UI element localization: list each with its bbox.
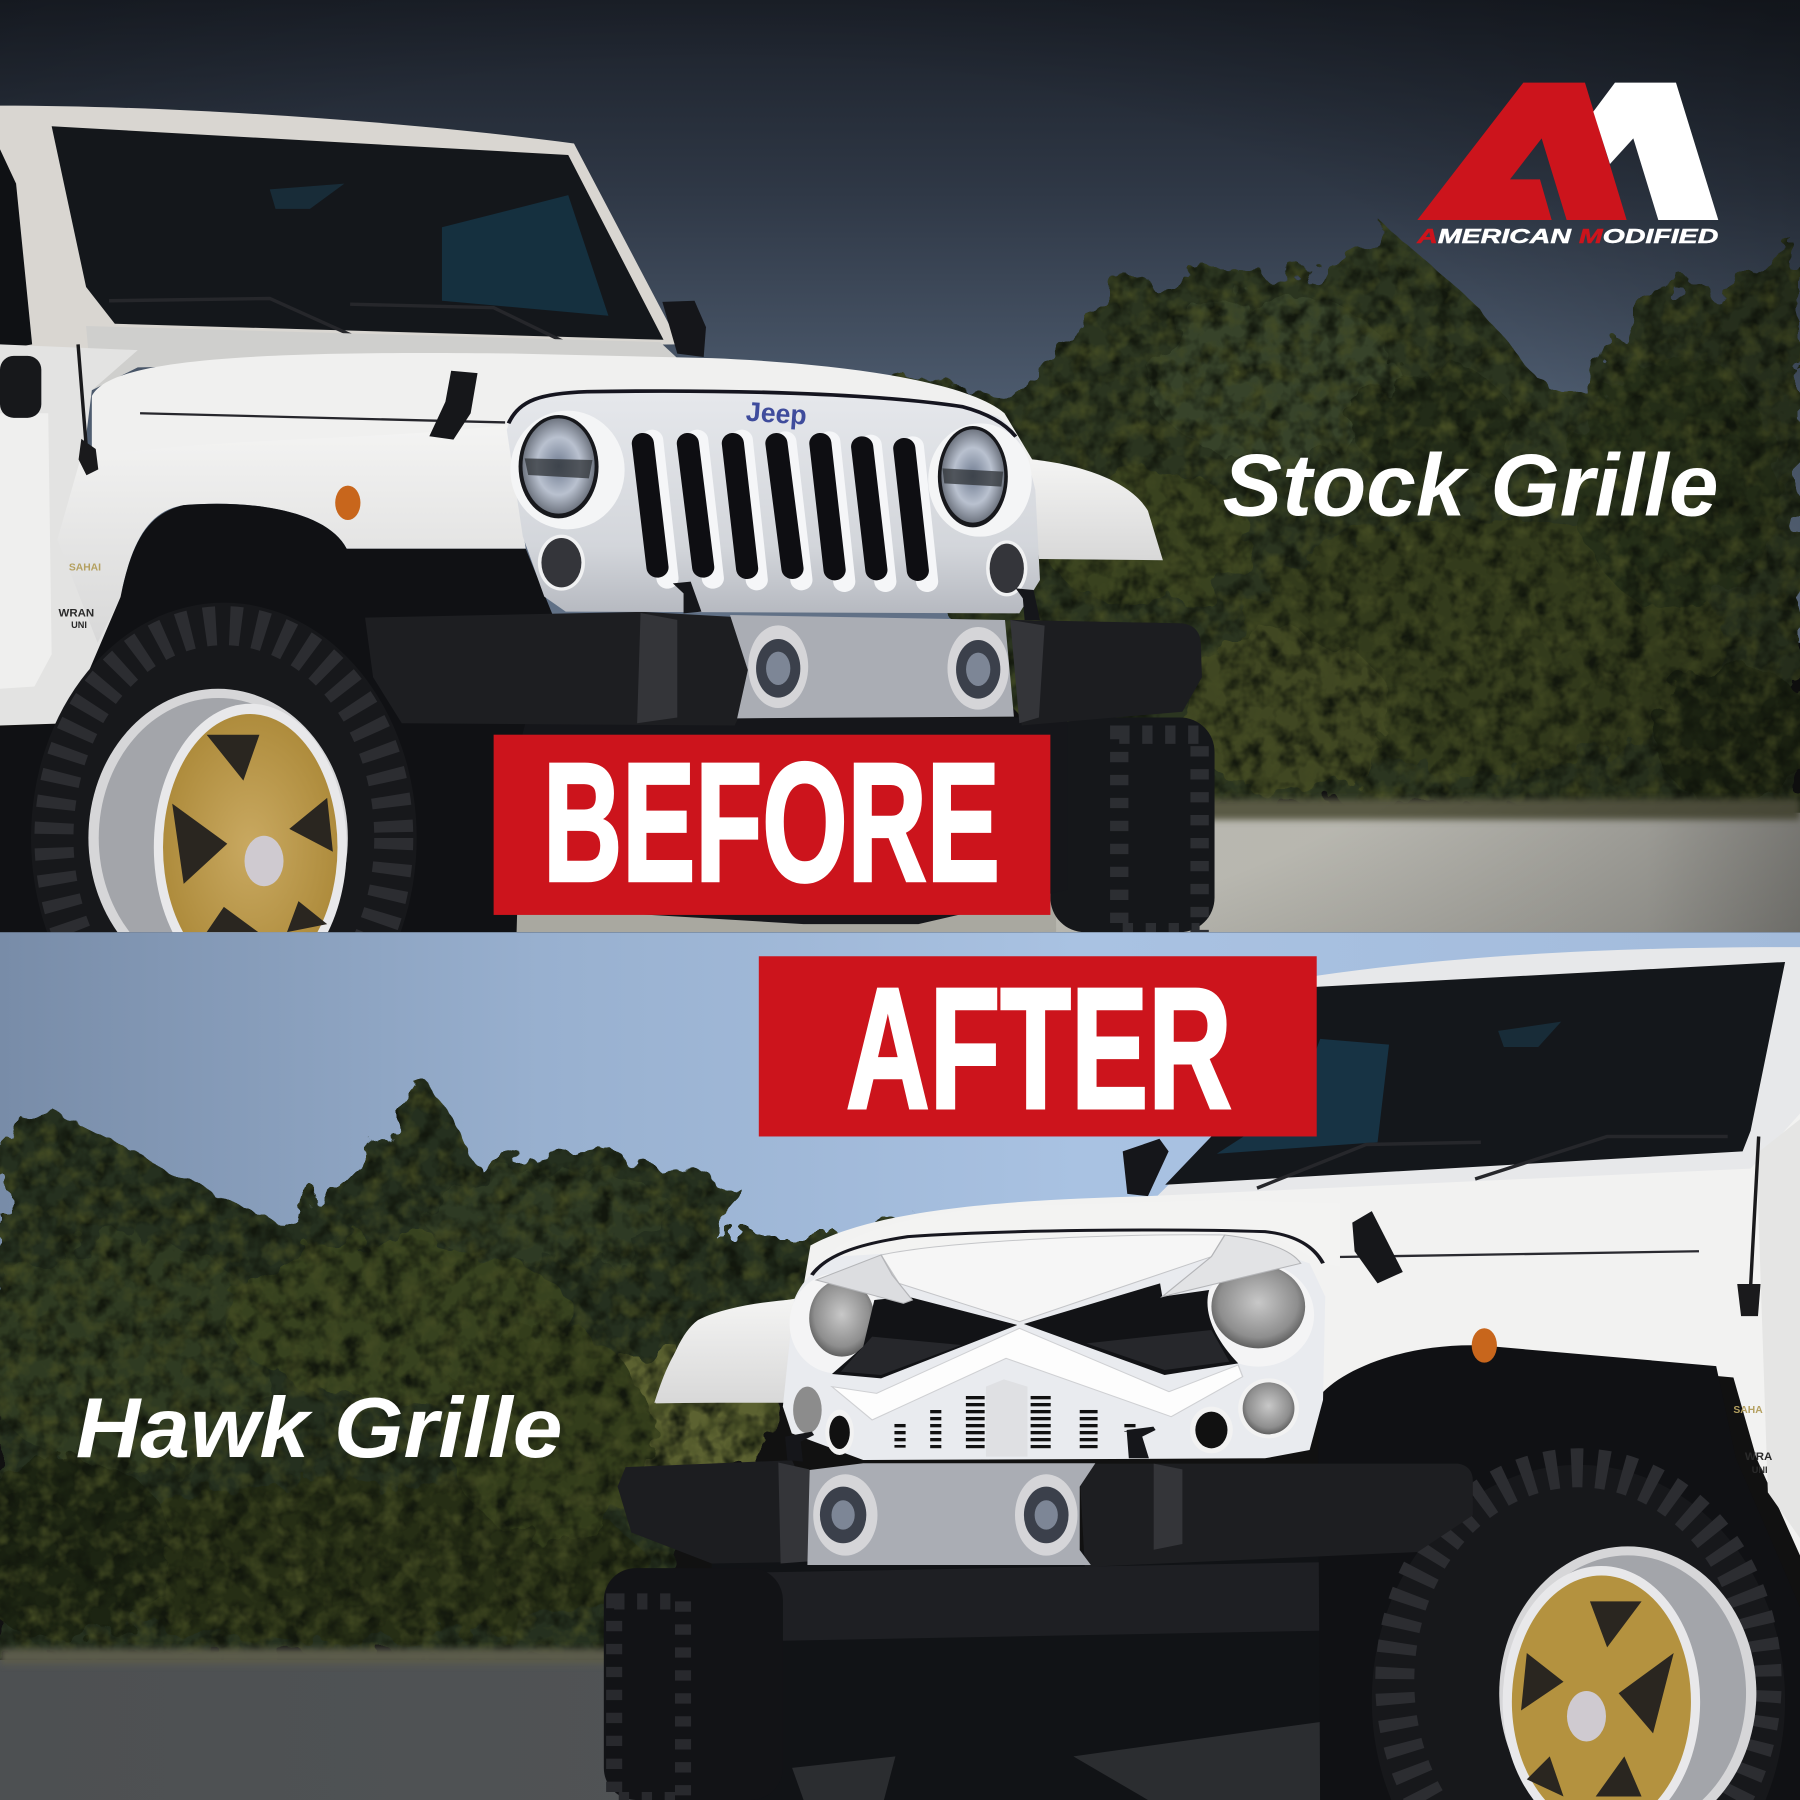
silver bumper insert bbox=[807, 1463, 1095, 1565]
hood crease bbox=[812, 1230, 1323, 1275]
sky bbox=[0, 932, 1800, 1311]
mirror bbox=[662, 301, 706, 357]
wipers bbox=[1257, 1136, 1728, 1188]
right lamp bbox=[1202, 1263, 1314, 1367]
sky bbox=[0, 0, 1800, 643]
hood crease bbox=[1337, 1251, 1699, 1257]
mesh dots bbox=[841, 1330, 1229, 1375]
cowl bbox=[86, 326, 677, 390]
grille slots bbox=[643, 443, 918, 571]
marker light bbox=[335, 486, 360, 520]
Before label bbox=[494, 727, 1050, 916]
door badges: SAHAI bbox=[69, 563, 101, 574]
windshield frame bbox=[0, 106, 680, 350]
hood line bbox=[140, 413, 505, 422]
vignette bbox=[0, 0, 1800, 932]
trees bbox=[0, 1079, 918, 1665]
logo mark white stroke bbox=[1593, 83, 1718, 220]
door bbox=[1756, 1119, 1800, 1538]
marker light bbox=[1472, 1328, 1497, 1363]
wipers bbox=[109, 297, 563, 340]
right front tire bbox=[1050, 717, 1215, 932]
left lamp bbox=[790, 1273, 883, 1373]
silver bumper insert bbox=[730, 615, 1014, 718]
Jeep badge: Jeep bbox=[745, 397, 808, 431]
door badges: UNI bbox=[1752, 1465, 1768, 1475]
stock grille bbox=[507, 390, 1040, 718]
hood bbox=[92, 353, 1039, 482]
door badges: WRAN bbox=[59, 607, 94, 619]
left mesh bbox=[832, 1297, 1017, 1378]
body bbox=[804, 1114, 1800, 1555]
hood latch bbox=[429, 371, 478, 440]
Before label: BEFORE bbox=[543, 727, 1000, 916]
lower vent slats bbox=[894, 1394, 1136, 1448]
hooks bbox=[785, 1427, 1156, 1462]
mirror bbox=[1123, 1139, 1169, 1196]
wheel: left front bbox=[34, 606, 414, 932]
bumper bbox=[618, 1460, 1473, 1567]
door and body bbox=[0, 344, 138, 726]
door badges: SAHA bbox=[1733, 1405, 1763, 1416]
grille body bbox=[783, 1233, 1325, 1460]
fender bbox=[70, 448, 526, 642]
left headlight bbox=[510, 411, 625, 529]
heading: Stock Grille: Stock Grille bbox=[1223, 435, 1718, 534]
road bbox=[0, 1648, 1800, 1800]
hooks bbox=[673, 582, 1040, 620]
wheel well bbox=[1318, 1345, 1800, 1800]
panel: after photo bbox=[0, 932, 1800, 1800]
trees bbox=[895, 230, 1800, 815]
undercarriage bbox=[482, 717, 1068, 924]
right brow bbox=[1162, 1235, 1301, 1297]
road bbox=[1033, 813, 1800, 932]
door badges bbox=[1733, 1405, 1772, 1475]
right headlight bbox=[928, 423, 1032, 537]
side lamps bbox=[793, 1378, 1299, 1455]
left tire bbox=[604, 1568, 783, 1800]
hood crease bbox=[509, 391, 1016, 437]
fog lights bbox=[813, 1474, 1077, 1556]
left brow bbox=[816, 1255, 912, 1303]
heading: Hawk Grille: Hawk Grille bbox=[76, 1380, 562, 1475]
hood bbox=[812, 1200, 1340, 1275]
center vent post bbox=[986, 1379, 1027, 1457]
roof and windshield frame bbox=[1148, 947, 1800, 1205]
antenna bbox=[78, 344, 96, 473]
fender bbox=[654, 1297, 804, 1403]
logo wordmark: AMERICAN MODIFIED bbox=[1416, 225, 1718, 248]
door badges: WRA bbox=[1745, 1451, 1772, 1463]
windshield glass bbox=[52, 126, 664, 340]
door badges bbox=[59, 563, 101, 630]
grille panel bbox=[507, 390, 1040, 613]
turn signals bbox=[538, 535, 1027, 596]
slot highlights bbox=[652, 440, 927, 582]
center visor bbox=[881, 1235, 1225, 1322]
chevron bbox=[832, 1328, 1243, 1420]
undercarriage bbox=[712, 1538, 1481, 1800]
wheel well bbox=[0, 504, 553, 932]
side window bbox=[0, 149, 32, 350]
antenna bbox=[1739, 1136, 1759, 1314]
panel: before photo bbox=[0, 0, 1800, 932]
After label: AFTER bbox=[846, 953, 1232, 1145]
fog lights bbox=[748, 625, 1009, 710]
road seen under vehicle bbox=[792, 1722, 1320, 1800]
hood latch bbox=[1352, 1211, 1403, 1283]
logo mark red A bbox=[1417, 83, 1627, 220]
right fender bbox=[1030, 459, 1163, 560]
door badges: UNI bbox=[71, 620, 87, 630]
hawk grille bbox=[656, 1200, 1340, 1565]
right mesh bbox=[1024, 1283, 1238, 1375]
logo: American Modified bbox=[1416, 83, 1718, 248]
bumper bbox=[365, 612, 1202, 726]
fender nose bbox=[656, 1299, 794, 1403]
wheel: right front bbox=[1372, 1465, 1785, 1800]
windshield glass bbox=[1165, 962, 1785, 1185]
